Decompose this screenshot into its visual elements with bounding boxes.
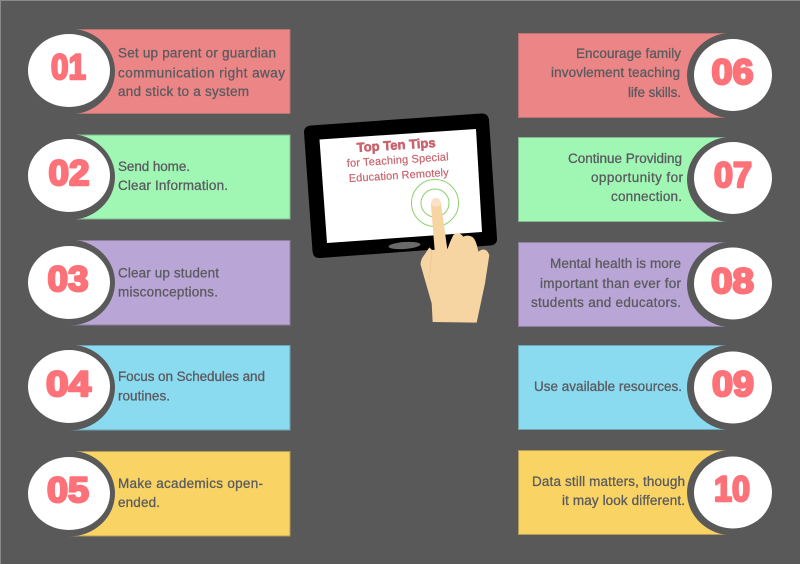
panel: tip 03 — [23, 240, 290, 326]
panel: tip 06: invovlement teaching — [551, 65, 680, 80]
panel: tip 04 — [23, 344, 290, 430]
panel: tip 01: Set up parent or guardian — [118, 46, 276, 60]
panel: tip 07: Continue Providing — [568, 151, 682, 166]
panel: tip 07: opportunity for — [591, 170, 684, 185]
panel: tip 09: Use available resources. — [534, 379, 682, 394]
panel: tip 10: it may look different. — [562, 493, 685, 508]
panel: tip 05: ended. — [118, 495, 160, 510]
tablet illustration — [304, 113, 497, 323]
panel: tip 08: students and educators. — [531, 295, 681, 310]
panel: tip 05: 05 — [47, 470, 89, 510]
panel: tip 07: connection. — [611, 189, 682, 204]
touch ripple circles — [412, 180, 458, 226]
panel: tip 04: routines. — [118, 388, 170, 404]
panel: tip 03: 03 — [48, 259, 88, 299]
panel: tip 08: 08 — [711, 261, 754, 301]
panel: tip 07 — [518, 136, 779, 222]
panel: tip 08: important than ever for — [540, 276, 682, 291]
panel: tip 09: 09 — [712, 364, 754, 404]
panel: tip 06: life skills. — [628, 85, 681, 100]
panel: tip 01 — [23, 28, 290, 114]
panel: tip 02: Send home. — [118, 159, 190, 174]
tablet body — [304, 113, 497, 258]
panel: tip 01: and stick to a system — [118, 84, 249, 99]
panel: tip 02: 02 — [48, 153, 90, 193]
tablet heading: for Teaching Special — [346, 151, 449, 170]
panel: tip 04: 04 — [46, 364, 91, 404]
panel: tip 03: misconceptions. — [118, 284, 218, 300]
tablet heading: Top Ten Tips — [356, 135, 436, 155]
tablet home button — [388, 241, 421, 250]
tablet screen — [320, 129, 482, 243]
panel: tip 05 — [23, 450, 290, 536]
panel: tip 02: Clear Information. — [118, 178, 228, 193]
panel: tip 02 — [23, 134, 290, 220]
panel: tip 09 — [518, 344, 779, 430]
panel: tip 10: Data still matters, though — [532, 474, 685, 489]
panel: tip 06 — [518, 32, 779, 118]
tablet heading: Education Remotely — [348, 167, 449, 185]
tablet heading — [346, 135, 449, 185]
panel: tip 10: 10 — [714, 469, 750, 509]
panel: tip 06: 06 — [712, 52, 754, 92]
hand pointing at screen — [421, 198, 489, 323]
panel: tip 07: 07 — [714, 155, 752, 195]
panel: tip 01: communication right away — [118, 66, 285, 80]
panel: tip 06: Encourage family — [576, 46, 681, 61]
panel: tip 08: Mental health is more — [550, 256, 681, 271]
panel: tip 01: 01 — [51, 47, 86, 87]
panel: tip 08 — [518, 242, 779, 328]
panel: tip 05: Make academics open- — [118, 476, 263, 491]
panel: tip 04: Focus on Schedules and — [118, 369, 265, 384]
panel: tip 10 — [518, 450, 779, 536]
panel: tip 03: Clear up student — [118, 266, 219, 280]
